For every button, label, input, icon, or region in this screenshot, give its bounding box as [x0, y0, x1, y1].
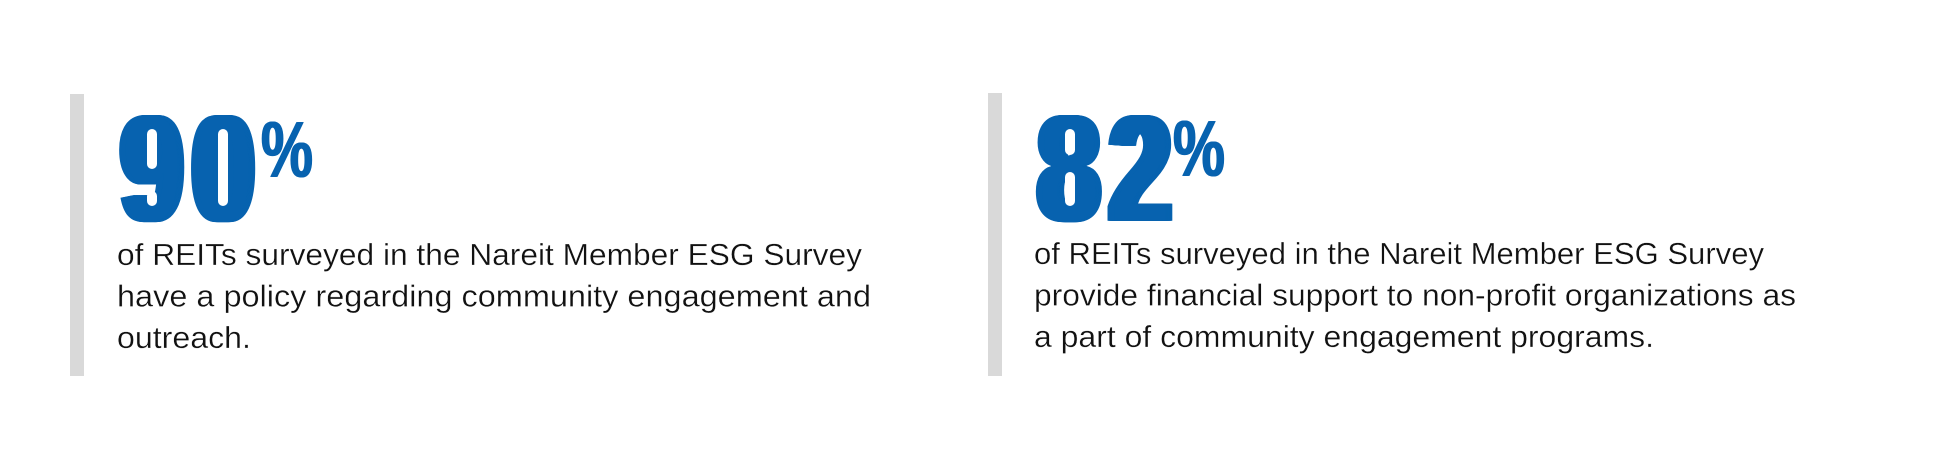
percent sign: % [261, 105, 313, 194]
description text: a part of community engagement programs. [1034, 319, 1654, 354]
accent bar left [70, 94, 84, 376]
description text: have a policy regarding community engagement and [117, 278, 871, 314]
description text: of REITs surveyed in the Nareit Member ESG Survey [1034, 236, 1764, 271]
panel: 90 percent statistic [70, 85, 871, 376]
big number: 90: 90 [122, 85, 265, 254]
percent sign: % [1172, 104, 1224, 193]
description text [1034, 236, 1796, 354]
description text: of REITs surveyed in the Nareit Member ESG Survey [117, 237, 863, 272]
big number: 82: 82 [1038, 85, 1181, 254]
description text [117, 237, 871, 355]
panel: 82 percent statistic [988, 85, 1796, 376]
accent bar right [988, 93, 1002, 376]
description text: provide financial support to non-profit organizations as [1034, 278, 1796, 312]
description text: outreach. [117, 320, 251, 355]
